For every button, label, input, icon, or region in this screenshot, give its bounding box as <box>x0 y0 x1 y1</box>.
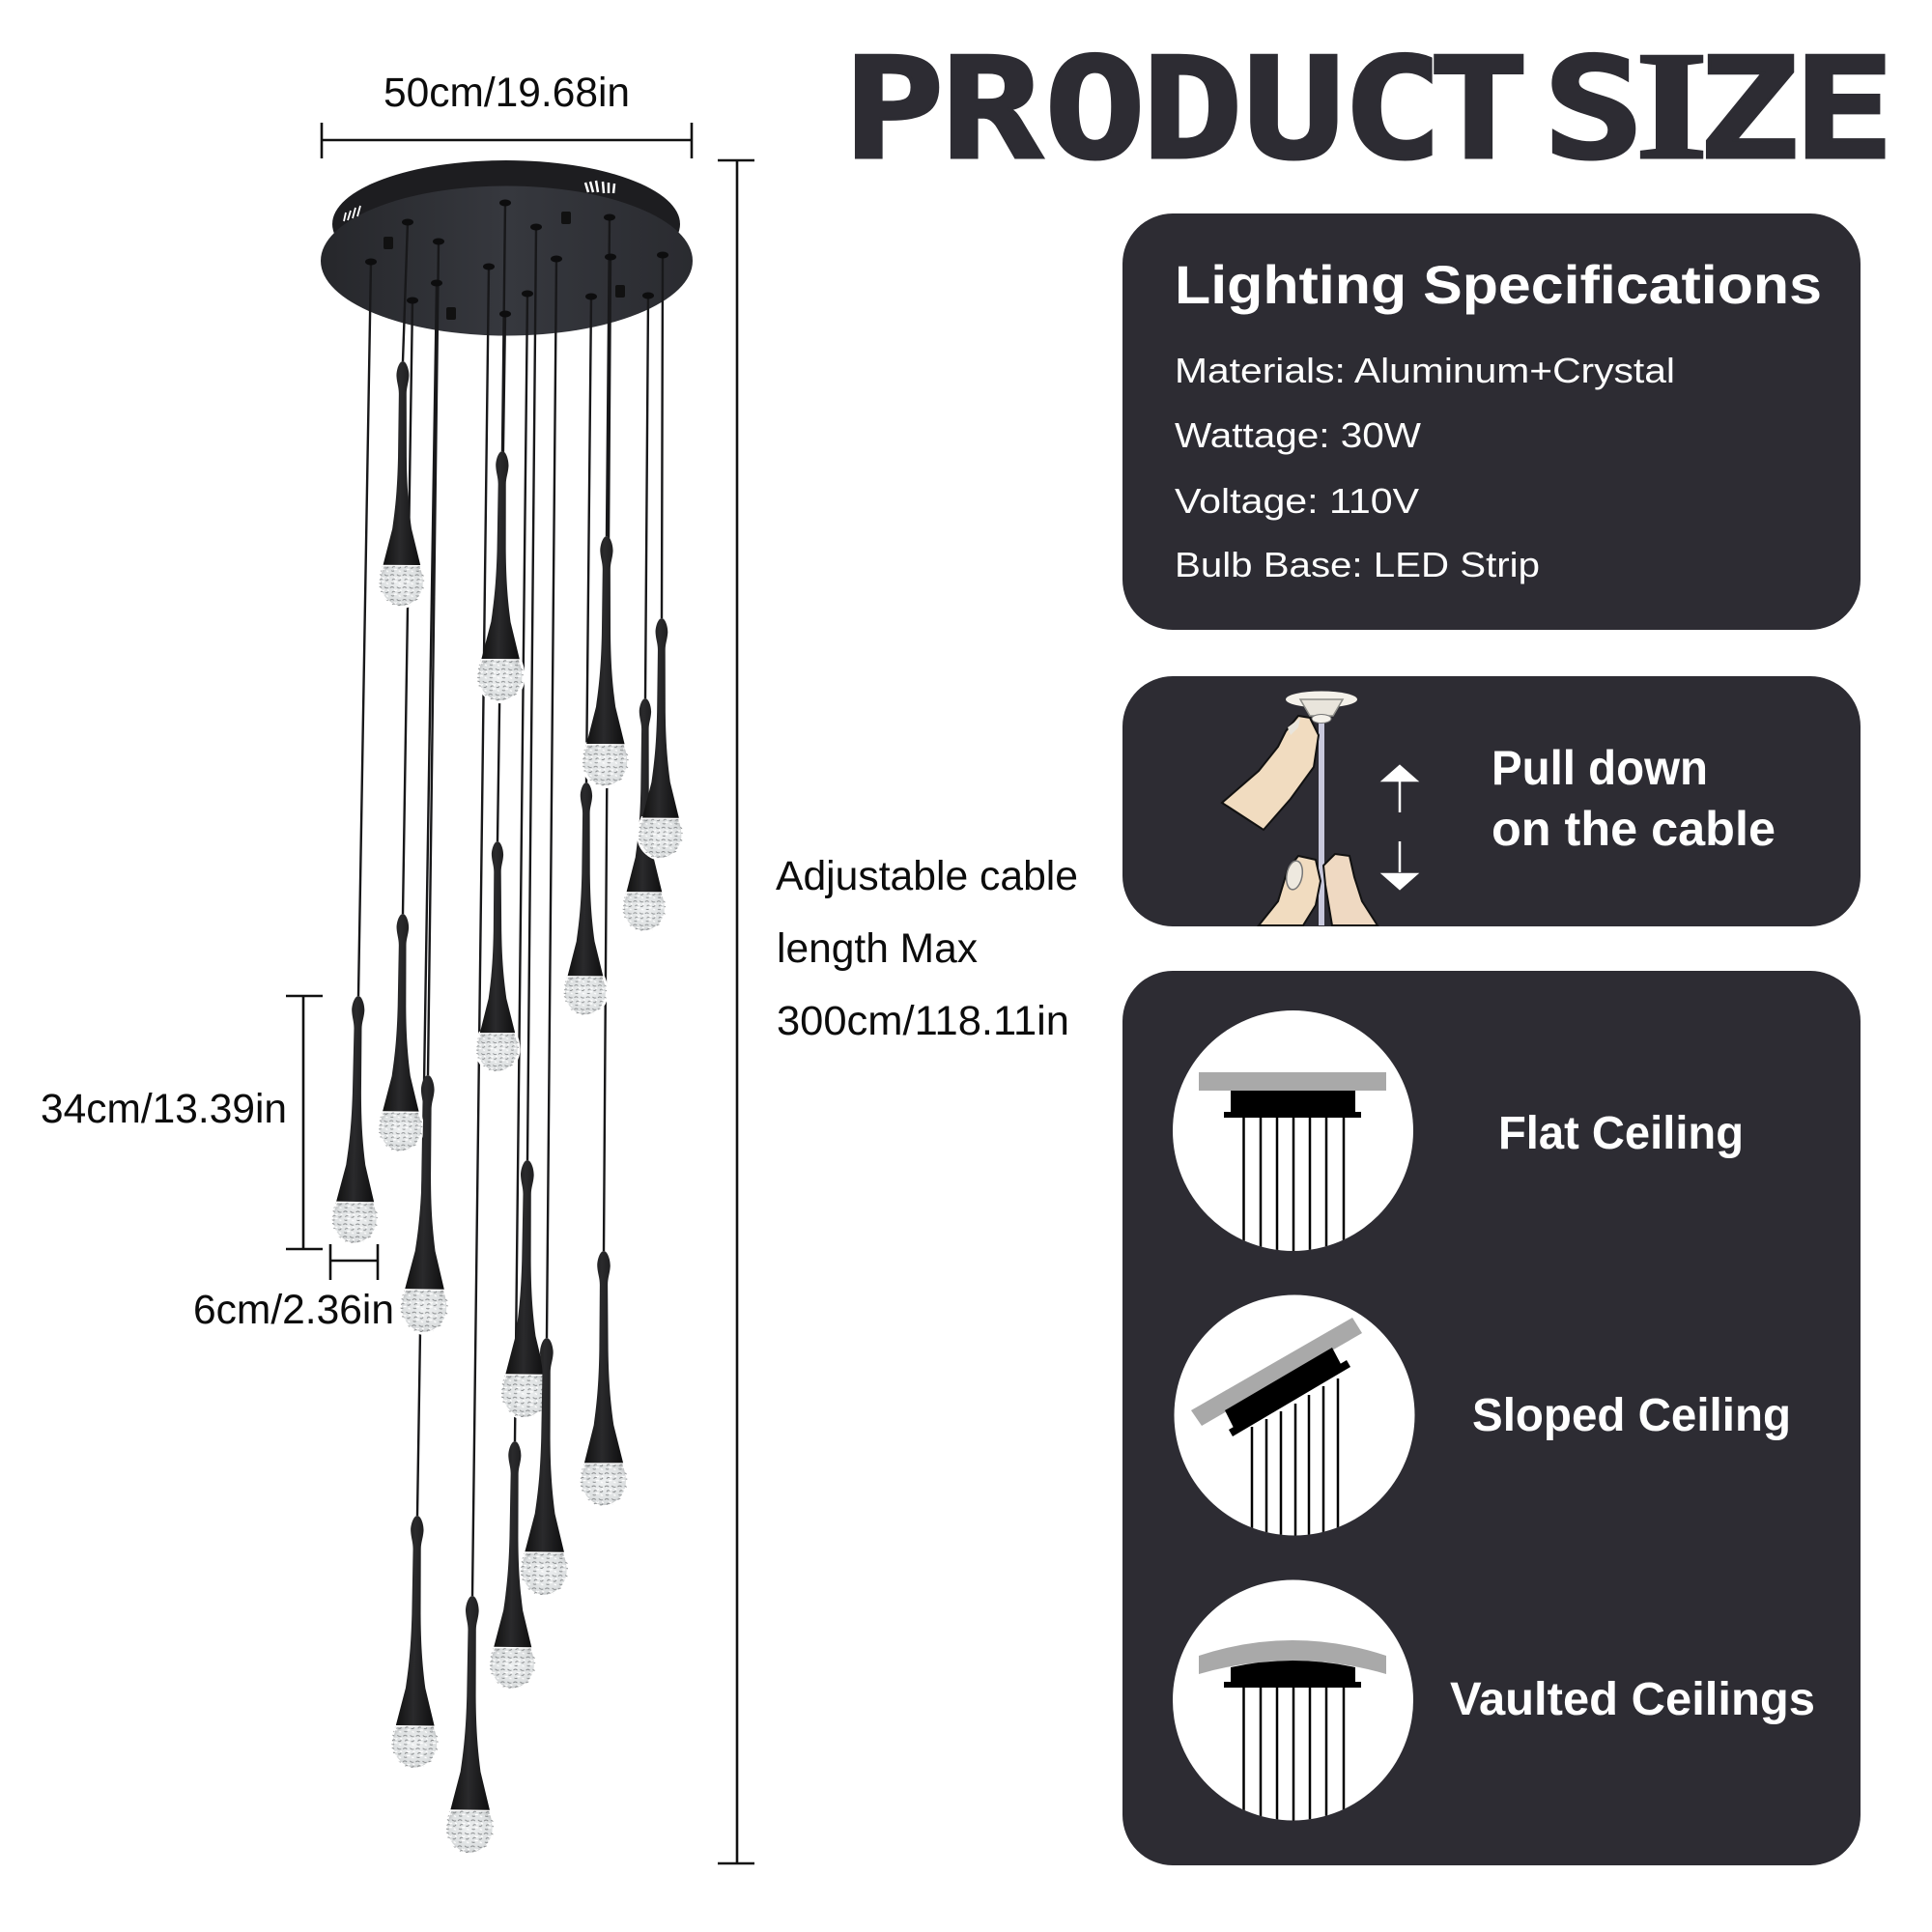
pendant J <box>400 1075 452 1334</box>
pendant B <box>477 451 526 702</box>
ceiling canopy <box>321 160 693 336</box>
pendant E <box>623 698 667 932</box>
icon: flat ceiling <box>1173 1010 1413 1256</box>
panel: ceiling types <box>1122 971 1861 1865</box>
suspension cords <box>358 203 663 1596</box>
dimension: canopy width <box>322 71 692 158</box>
adjustable cable note <box>776 854 1078 1044</box>
dimension: pendant width <box>193 1244 394 1333</box>
adjustable cable note: 300cm/118.11in <box>777 999 1069 1044</box>
pendant K <box>501 1160 552 1419</box>
cord mounts <box>365 199 668 317</box>
arrow down <box>1383 841 1416 889</box>
spec: voltage: Voltage: 110V <box>1175 481 1419 521</box>
pendant M <box>521 1338 571 1597</box>
icon: vaulted ceiling <box>1173 1580 1413 1826</box>
chandelier with pendants <box>321 160 693 1855</box>
pendant F <box>564 782 608 1016</box>
title: I <box>1635 21 1708 191</box>
pendant G <box>476 841 519 1072</box>
adjustable cable note: Adjustable cable <box>776 854 1078 899</box>
pendant A <box>379 361 425 608</box>
panel: lighting specifications <box>1122 213 1861 630</box>
pendant I <box>331 996 382 1244</box>
dimension: total height <box>718 160 754 1863</box>
pull down label: Pull down <box>1492 741 1708 795</box>
dimension: canopy width: 50cm/19.68in <box>384 71 630 116</box>
panel heading: Lighting Specifications <box>1175 254 1822 315</box>
dimension: pendant height <box>41 996 323 1249</box>
pendant P <box>446 1596 497 1855</box>
pendant D <box>639 618 684 859</box>
panel: pull down cable <box>1122 676 1861 926</box>
pendant H <box>379 914 425 1152</box>
spec: bulb base: Bulb Base: LED Strip <box>1175 545 1540 584</box>
adjustable cable note: length Max <box>777 926 978 972</box>
title: ZE <box>1698 27 1894 190</box>
spec: wattage: Wattage: 30W <box>1175 415 1421 455</box>
pendant O <box>391 1516 440 1769</box>
icon: sloped ceiling <box>1175 1294 1414 1541</box>
label: flat ceiling: Flat Ceiling <box>1498 1108 1744 1159</box>
label: sloped ceiling: Sloped Ceiling <box>1472 1390 1791 1441</box>
dimension: pendant height: 34cm/13.39in <box>41 1087 287 1132</box>
pendant L <box>581 1251 627 1507</box>
pendant N <box>490 1441 538 1690</box>
panel: pull down cable: on the cable <box>1492 802 1776 856</box>
illustration: hands pulling cable <box>1222 692 1378 925</box>
arrow up <box>1383 766 1416 812</box>
pendant C <box>582 536 630 787</box>
title: PRODUCT S <box>843 27 1644 190</box>
spec: materials: Materials: Aluminum+Crystal <box>1175 351 1675 390</box>
label: vaulted ceilings: Vaulted Ceilings <box>1450 1674 1815 1725</box>
dimension: pendant width: 6cm/2.36in <box>193 1288 394 1333</box>
